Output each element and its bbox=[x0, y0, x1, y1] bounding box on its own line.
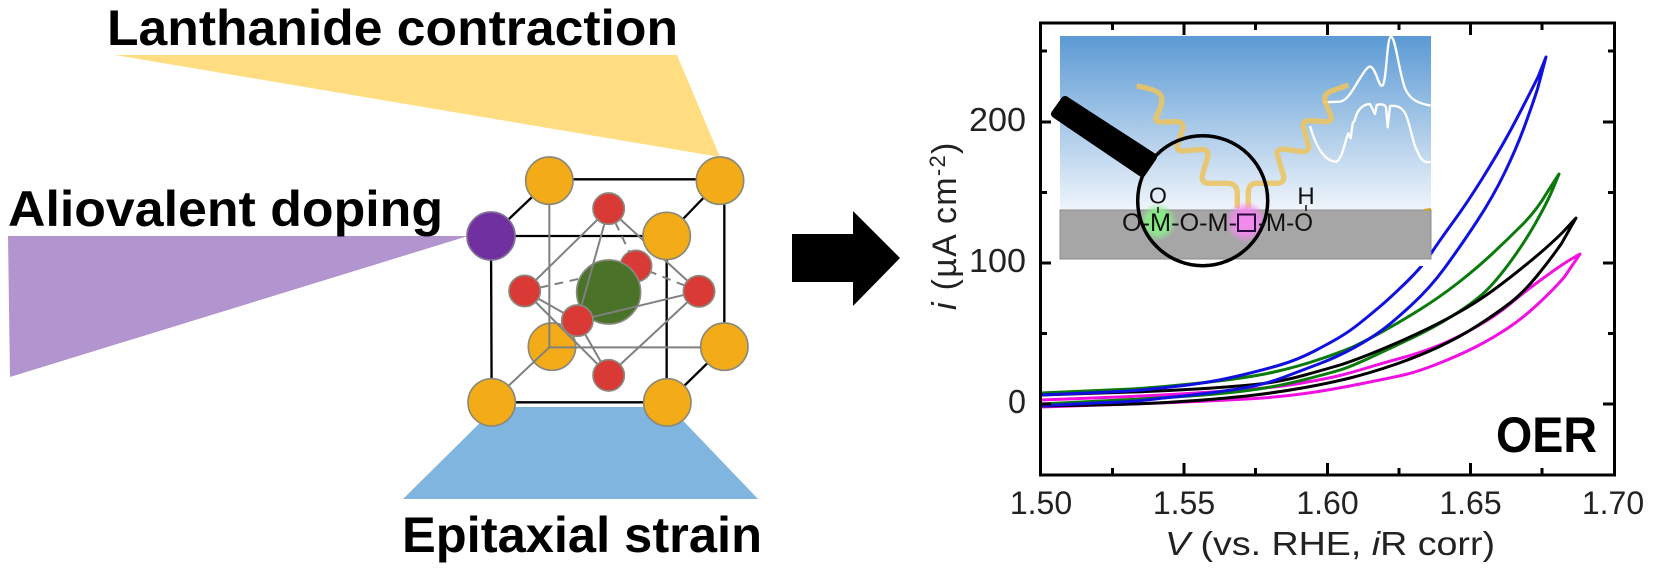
cube edges bbox=[491, 179, 724, 402]
atom: front oxygen bbox=[562, 305, 593, 336]
arrow: crystal to OER bbox=[792, 211, 900, 306]
x-axis labels: 1.60 bbox=[1296, 485, 1359, 521]
x-axis labels bbox=[1010, 485, 1644, 521]
curve: green bbox=[1041, 174, 1559, 404]
crystal structure: perovskite unit cell bbox=[467, 157, 748, 426]
dashed octahedron bonds bbox=[525, 209, 699, 291]
plot frame bbox=[1040, 23, 1614, 475]
y-axis title: ) bbox=[926, 141, 964, 154]
curve: magenta bbox=[1041, 254, 1580, 407]
atom: front top-right orange bbox=[643, 212, 690, 260]
octahedron bonds bbox=[525, 209, 699, 375]
axis ticks bbox=[1040, 23, 1615, 475]
x-axis labels: 1.50 bbox=[1010, 485, 1072, 521]
inset: white backing below surface bbox=[1060, 255, 1431, 266]
inset: catalyst surface slab bbox=[1060, 210, 1431, 259]
inset: edge of yellow wave bbox=[1424, 209, 1431, 210]
atom: front lower-left orange bbox=[468, 379, 515, 426]
y-axis labels: 100 bbox=[969, 242, 1026, 279]
atom: rear lower-right orange bbox=[701, 323, 748, 370]
inset: vacancy square bbox=[1238, 214, 1255, 231]
heading: Aliovalent doping: Aliovalent doping bbox=[8, 181, 443, 237]
inset: magnifying glass lens bbox=[1138, 136, 1268, 266]
curve: blue bbox=[1041, 57, 1546, 406]
inset: adsorbate bonds bbox=[1158, 205, 1306, 213]
atom: left oxygen bbox=[509, 275, 540, 307]
atom: top oxygen bbox=[593, 193, 624, 224]
inset: yellow photon waves bbox=[1137, 85, 1348, 208]
atom: front lower-right orange bbox=[644, 379, 691, 426]
heading: Lanthanide contraction: Lanthanide contraction bbox=[107, 0, 678, 56]
OER label: OER bbox=[1496, 407, 1597, 463]
atom: rear top-left orange bbox=[526, 157, 573, 204]
y-axis labels bbox=[969, 101, 1026, 420]
inset: adsorbed H: H bbox=[1297, 183, 1315, 210]
wedge: aliovalent doping bbox=[8, 236, 468, 377]
atom: right oxygen bbox=[683, 276, 715, 307]
atom: rear top-right orange bbox=[696, 157, 744, 204]
inset: chain text right: -M-O bbox=[1258, 209, 1313, 237]
atom: purple dopant bbox=[467, 212, 515, 260]
inset: sky gradient panel bbox=[1060, 36, 1431, 211]
y-axis title: -2 bbox=[925, 154, 950, 176]
y-axis labels: 200 bbox=[969, 101, 1026, 138]
inset: surface chain text: O-M-O-M- bbox=[1122, 209, 1237, 237]
y-axis labels: 0 bbox=[1008, 383, 1026, 420]
curve: black bbox=[1041, 218, 1576, 406]
atom: central green cation bbox=[577, 260, 641, 324]
inset: magenta vacancy glow bbox=[1225, 201, 1267, 243]
x-axis labels: 1.65 bbox=[1439, 485, 1502, 521]
y-axis title: i (µA cm bbox=[926, 176, 964, 310]
wedge: epitaxial strain bbox=[403, 407, 758, 499]
atom: rear lower-left orange bbox=[528, 323, 576, 370]
atom: rear oxygen bbox=[620, 250, 652, 282]
x-axis labels: 1.55 bbox=[1153, 485, 1215, 521]
wedge: lanthanide contraction bbox=[115, 55, 720, 157]
inset: green surface glow bbox=[1139, 203, 1177, 241]
chart: OER current-voltage curves bbox=[925, 23, 1644, 562]
heading: Epitaxial strain: Epitaxial strain bbox=[402, 507, 762, 563]
hidden cube edges bbox=[491, 181, 724, 402]
inset: adsorbed O: O bbox=[1149, 182, 1167, 208]
inset: magnifying glass handle bbox=[1055, 100, 1153, 173]
x-axis title: V (vs. RHE, iR corr) bbox=[1165, 525, 1495, 562]
inset: spectra white curves bbox=[1310, 37, 1431, 162]
atom: bottom oxygen bbox=[593, 360, 624, 391]
x-axis labels: 1.70 bbox=[1582, 485, 1644, 521]
